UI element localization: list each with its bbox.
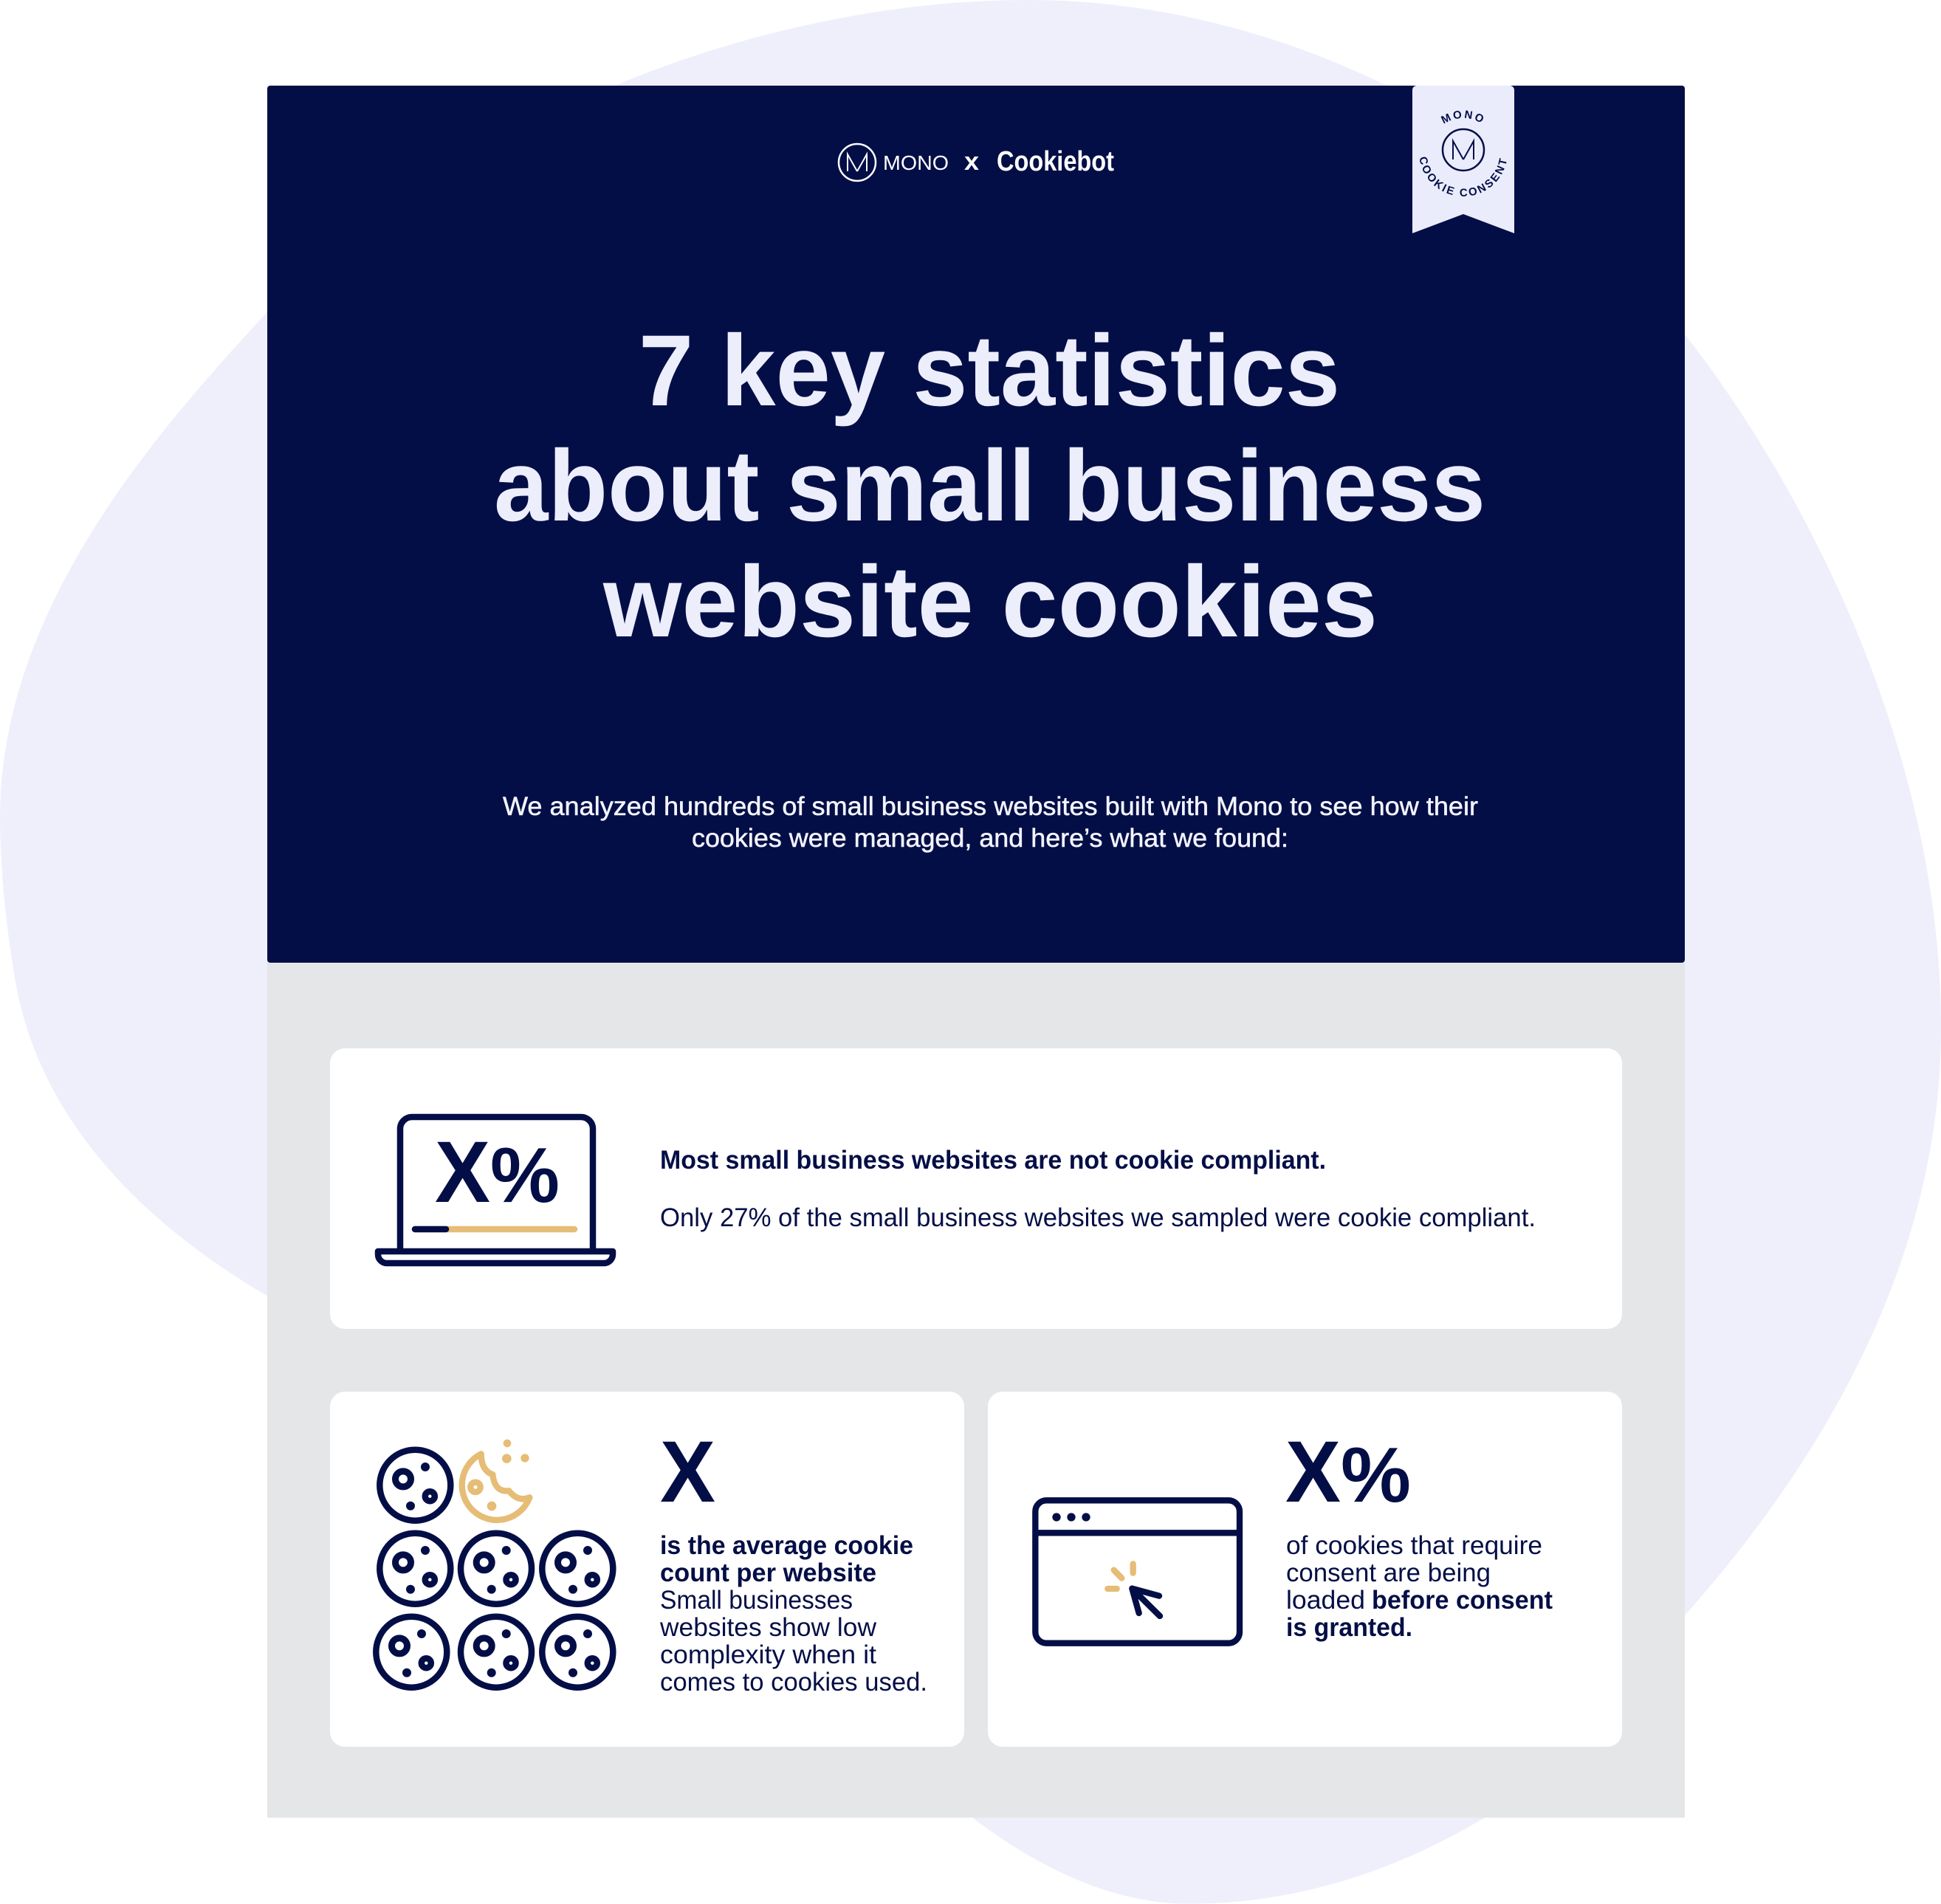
intro text: cookies were managed, and here’s what we found: [692,824,1288,853]
stat description: Small businesses [660,1586,853,1615]
title: website cookies [602,546,1378,659]
stat description [1286,1531,1553,1642]
panel: statistics background [267,952,1685,1818]
title: 7 key statistics [639,315,1340,427]
stat description [659,1531,927,1697]
title: about small business [494,430,1485,543]
logo: Mono [839,144,949,181]
stat description: websites show low [659,1613,877,1642]
stat description: is granted. [1286,1613,1412,1642]
intro text: We analyzed hundreds of small business websites built with Mono to see how their [503,792,1478,821]
icon: laptop with X%: X [435,1124,490,1221]
big stat percent sign: % [1341,1432,1411,1519]
big stat X: X [660,1423,715,1521]
logo: Cookiebot: Cookiebot [997,146,1114,177]
card: compliance [330,1048,1622,1329]
stat description: of cookies that require [1286,1531,1542,1560]
icon: laptop with X%: % [490,1132,560,1219]
stat description: count per website [660,1558,876,1587]
big stat X%: X [1285,1423,1341,1521]
card heading: Most small business websites are not cookie compliant. [660,1146,1326,1175]
stat description: comes to cookies used. [660,1668,927,1697]
cross symbol: x [964,148,979,176]
logo: Mono: MONO [883,151,949,174]
card: cookies before consent [988,1392,1622,1747]
stat description: consent are being [1286,1558,1491,1587]
ribbon badge [1412,86,1514,233]
icon: laptop with X% [378,1117,613,1263]
intro text [503,792,1478,853]
ribbon badge: MONO [1441,111,1483,124]
card: average cookie count [330,1392,964,1747]
stat description: before consent [1372,1586,1553,1615]
title [494,315,1485,659]
card body text: Only 27% of the small business websites we sampled were cookie compliant. [660,1203,1536,1232]
stat description: loaded [1286,1586,1365,1615]
stat description: is the average cookie [660,1531,913,1560]
stat description: complexity when it [660,1640,876,1669]
icon: browser with cursor [1035,1500,1240,1643]
ribbon badge: COOKIE CONSENT [1420,157,1506,196]
icon: cookies [376,1440,613,1688]
panel: header [267,86,1685,963]
